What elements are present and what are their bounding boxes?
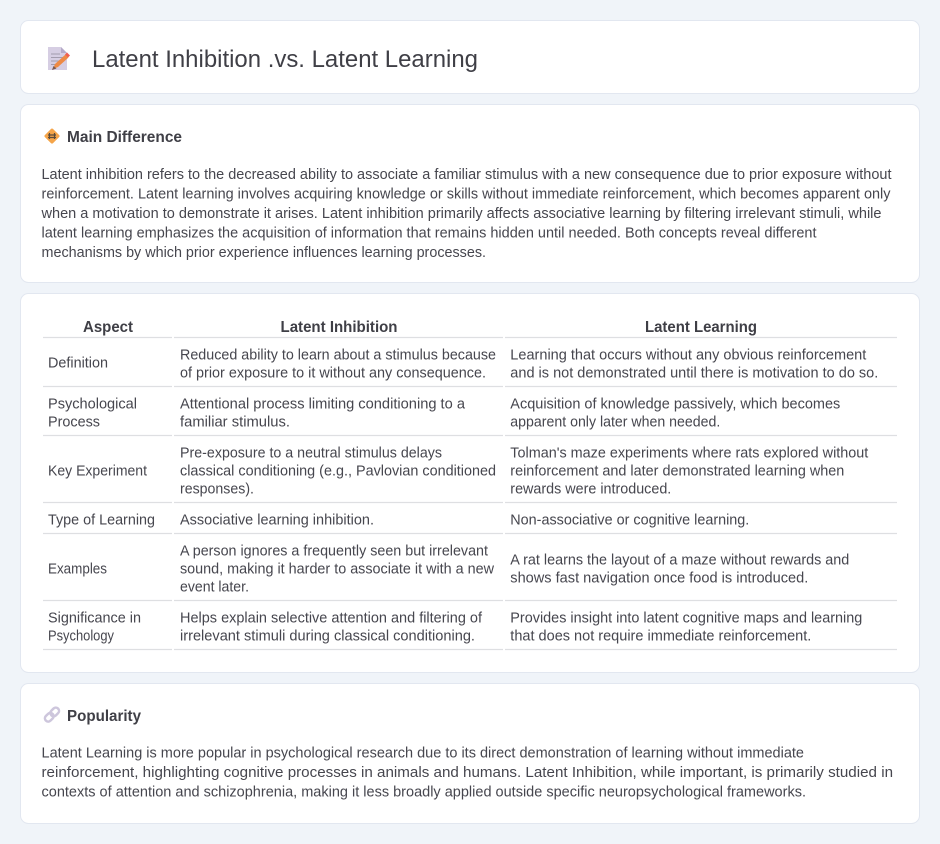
text block: popularity paragraph — [42, 746, 893, 801]
panel: main difference — [20, 104, 920, 282]
row: examples: shows fast navigation once food is introduced. — [510, 570, 808, 586]
row: type of learning: Non-associative or cognitive learning. — [510, 512, 749, 528]
table header row: Aspect — [83, 319, 134, 336]
row: examples: event later. — [180, 579, 249, 595]
row: psychological process — [48, 396, 840, 430]
row: definition: Learning that occurs without any obvious reinforcement — [510, 347, 866, 363]
row: key experiment: reinforcement and later demonstrated learning when — [510, 463, 844, 479]
row: significance in psychology: Provides insight into latent cognitive maps and learning — [510, 610, 862, 626]
row: examples: Examples — [48, 561, 107, 577]
row: key experiment — [48, 445, 868, 497]
text block: main difference paragraph: latent learning emphasizes the acquisition of information that remains hidden until needed. Both concepts reveal different — [42, 225, 816, 241]
row: examples: A person ignores a frequently seen but irrelevant — [180, 543, 488, 559]
text block: main difference paragraph — [41, 167, 891, 261]
row: psychological process: apparent only later when needed. — [510, 414, 720, 430]
text block: main difference paragraph: mechanisms by which prior experience influences learning processes. — [42, 245, 486, 261]
panel: title header — [20, 20, 920, 94]
row: psychological process: Attentional process limiting conditioning to a — [180, 396, 466, 412]
row: type of learning: Associative learning inhibition. — [180, 512, 374, 528]
row: definition: and is not demonstrated until there is motivation to do so. — [510, 365, 878, 381]
heading: main difference: Main Difference — [67, 129, 182, 146]
panel: popularity — [20, 684, 920, 824]
table header row: Latent Learning — [645, 319, 757, 336]
icon: document with pencil — [48, 47, 70, 70]
row: psychological process: familiar stimulus. — [180, 414, 290, 430]
text block: popularity paragraph: contexts of attention and schizophrenia, making it less broadly applied outside specific neuropsychological frameworks. — [42, 785, 806, 801]
text block: popularity paragraph: Latent Learning is more popular in psychological research due to its direct demonstration of learning without immediate — [42, 746, 804, 762]
icon: diamond sign — [44, 128, 60, 144]
row: examples — [48, 543, 849, 595]
row: examples: A rat learns the layout of a maze without rewards and — [510, 552, 849, 568]
row: key experiment: Pre-exposure to a neutral stimulus delays — [180, 445, 442, 461]
row: significance in psychology — [48, 610, 862, 644]
row: significance in psychology: that does not require immediate reinforcement. — [510, 628, 811, 644]
text block: main difference paragraph: Latent inhibition refers to the decreased ability to associate a familiar stimulus with a new consequence due to prior exposure without — [42, 167, 892, 183]
title: Latent Inhibition .vs. Latent Learning — [92, 46, 478, 73]
row: significance in psychology: Helps explain selective attention and filtering of — [180, 610, 483, 626]
table header row: Latent Inhibition — [280, 319, 398, 336]
row: definition — [48, 347, 878, 381]
row: definition: Reduced ability to learn about a stimulus because — [180, 347, 496, 363]
text block: main difference paragraph: when a motivation to demonstrate it arises. Latent inhibition primarily affects associative learning by filtering irrelevant stimuli, while — [41, 206, 881, 222]
row: psychological process: Acquisition of knowledge passively, which becomes — [510, 396, 840, 412]
text block: main difference paragraph: reinforcement. Latent learning involves acquiring knowledge or skills without immediate reinforcement, which becomes apparent only — [42, 186, 891, 202]
text block: popularity paragraph: reinforcement, highlighting cognitive processes in animals and humans. Latent Inhibition, while important, is primarily studied in — [42, 765, 893, 781]
row: significance in psychology: Psychology — [48, 628, 115, 644]
row: psychological process: Psychological — [48, 396, 137, 412]
row: type of learning — [48, 512, 749, 528]
row: examples: sound, making it harder to associate it with a new — [180, 561, 494, 577]
table header row — [83, 319, 757, 336]
row: type of learning: Type of Learning — [48, 512, 155, 528]
row: key experiment: Key Experiment — [48, 463, 147, 479]
row: significance in psychology: Significance in — [48, 610, 141, 626]
row: significance in psychology: irrelevant stimuli during classical conditioning. — [180, 628, 475, 644]
row: definition: of prior exposure to it without any consequence. — [180, 365, 486, 381]
row: key experiment: classical conditioning (e.g., Pavlovian conditioned — [180, 463, 496, 479]
row: key experiment: rewards were introduced. — [510, 481, 671, 497]
row: key experiment: responses). — [180, 481, 254, 497]
icon: link — [44, 706, 60, 723]
row: key experiment: Tolman's maze experiments where rats explored without — [510, 445, 868, 461]
panel: comparison table — [20, 294, 920, 672]
row: psychological process: Process — [48, 414, 100, 430]
heading: popularity: Popularity — [67, 708, 141, 725]
row: definition: Definition — [48, 356, 108, 372]
